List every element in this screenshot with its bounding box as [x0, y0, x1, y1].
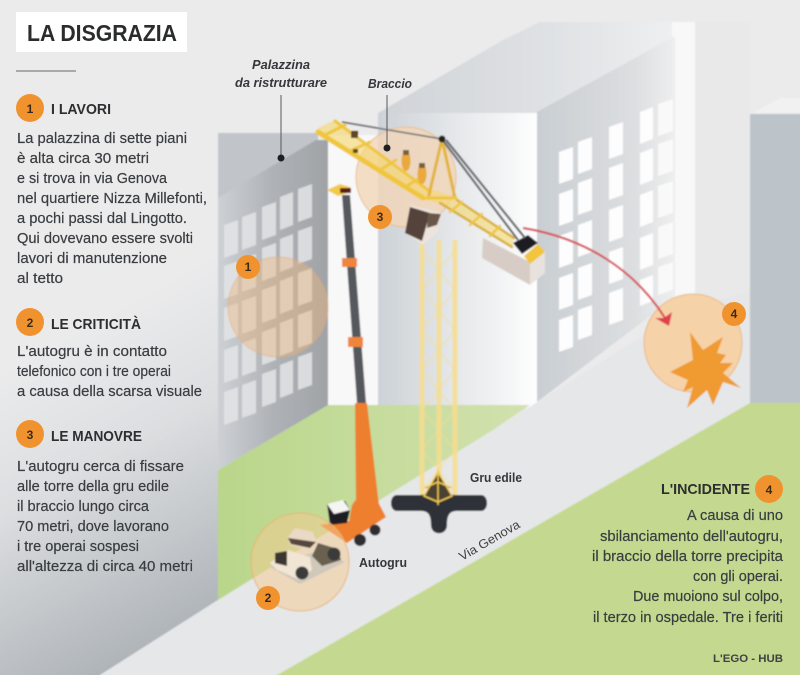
body 3 [17, 458, 193, 575]
heading 4: L'INCIDENTE [661, 481, 750, 498]
crane cab [405, 205, 442, 245]
heading 1: I LAVORI [51, 101, 111, 118]
building: centre facade [378, 113, 540, 408]
windows: right building [559, 99, 673, 352]
section 2: le criticita [16, 308, 202, 400]
marker 2 [256, 586, 280, 610]
ground: front lawn [265, 403, 800, 675]
section 3: le manovre [16, 420, 193, 575]
body 4: il terzo in ospedale. Tre i feriti [593, 609, 783, 626]
highlight circle 3 [356, 127, 456, 227]
label: palazzina da ristrutturare [235, 58, 327, 162]
section 1: i lavori [16, 94, 207, 287]
tower crane mast [422, 240, 455, 498]
title [16, 12, 187, 52]
body 1: a pochi passi dal Lingotto. [17, 210, 187, 227]
highlight circle 2 [251, 513, 349, 611]
body 1: e si trova in via Genova [17, 170, 168, 187]
section 4: l'incidente [592, 475, 784, 626]
marker 3: 3 [377, 210, 384, 224]
marker 3 [368, 205, 392, 229]
tower crane base [391, 470, 487, 533]
body 4: Due muoiono sul colpo, [633, 588, 783, 605]
marker 2: 2 [265, 591, 272, 605]
building: rear top band [378, 22, 695, 113]
label: braccio [368, 77, 412, 152]
body 2: a causa della scarsa visuale [17, 383, 202, 400]
highlight circle 4 [644, 294, 742, 392]
body 1: La palazzina di sette piani [17, 130, 187, 147]
badge 1 [16, 94, 44, 122]
body 2 [17, 343, 202, 400]
left shaded ground [0, 130, 218, 675]
building: palazzina da ristrutturare [218, 133, 328, 470]
badge 2: 2 [27, 316, 34, 330]
building: far right [750, 98, 800, 404]
windows: palazzina [224, 184, 312, 425]
body 2: L'autogru è in contatto [17, 343, 167, 360]
crane jib [318, 120, 514, 248]
body 4: sbilanciamento dell'autogru, [600, 528, 783, 545]
body 1: lavori di manutenzione [17, 250, 167, 267]
workers on jib [351, 131, 426, 184]
counterweight block [482, 235, 545, 285]
body 3: 70 metri, dove lavorano [17, 518, 169, 535]
body 3: L'autogru cerca di fissare [17, 458, 184, 475]
body 1: nel quartiere Nizza Millefonti, [17, 190, 207, 207]
heading 3: LE MANOVRE [51, 428, 142, 445]
body 1: al tetto [17, 270, 63, 287]
body 3: il braccio lungo circa [17, 498, 150, 515]
heading 2: LE CRITICITÀ [51, 316, 141, 333]
label: autogru: Autogru [359, 556, 407, 570]
credit: L'EGO - HUB [713, 653, 783, 665]
label: via genova: Via Genova [456, 517, 522, 564]
badge 2 [16, 308, 44, 336]
building: right wall [695, 22, 750, 407]
autogru boom [327, 184, 379, 505]
building: white corner strips [328, 22, 695, 405]
arrow: falling path [523, 228, 672, 326]
body 3: all'altezza di circa 40 metri [17, 558, 193, 575]
body 3: alle torre della gru edile [17, 478, 169, 495]
label: palazzina da ristrutturare: Palazzina [252, 58, 310, 72]
autogru chassis [320, 498, 386, 546]
label: gru edile: Gru edile [470, 471, 522, 485]
badge 3: 3 [27, 428, 34, 442]
marker 1: 1 [245, 260, 252, 274]
body 4: il braccio della torre precipita [592, 548, 784, 565]
ground: rear lawn [218, 405, 530, 600]
label: palazzina da ristrutturare: da ristrutturare [235, 76, 327, 90]
badge 3 [16, 420, 44, 448]
explosion [670, 332, 741, 408]
road surface [90, 290, 750, 675]
badge 1: 1 [27, 102, 34, 116]
badge 4 [755, 475, 783, 503]
body 3: i tre operai sospesi [17, 538, 139, 555]
highlight circle 1 [228, 257, 328, 357]
body 4 [592, 507, 784, 626]
crane cables [342, 122, 525, 240]
body 1: è alta circa 30 metri [17, 150, 149, 167]
body 2: telefonico con i tre operai [17, 363, 171, 380]
label: braccio: Braccio [368, 77, 412, 91]
building: right perspective face [537, 36, 675, 402]
marker 1 [236, 255, 260, 279]
badge 4: 4 [766, 483, 773, 497]
body 4: con gli operai. [693, 568, 783, 585]
body 1 [17, 130, 207, 287]
truck [270, 528, 345, 584]
marker 4: 4 [731, 307, 738, 321]
title: LA DISGRAZIA [27, 20, 177, 46]
marker 4 [722, 302, 746, 326]
body 4: A causa di uno [687, 507, 783, 524]
body 1: Qui dovevano essere svolti [17, 230, 193, 247]
